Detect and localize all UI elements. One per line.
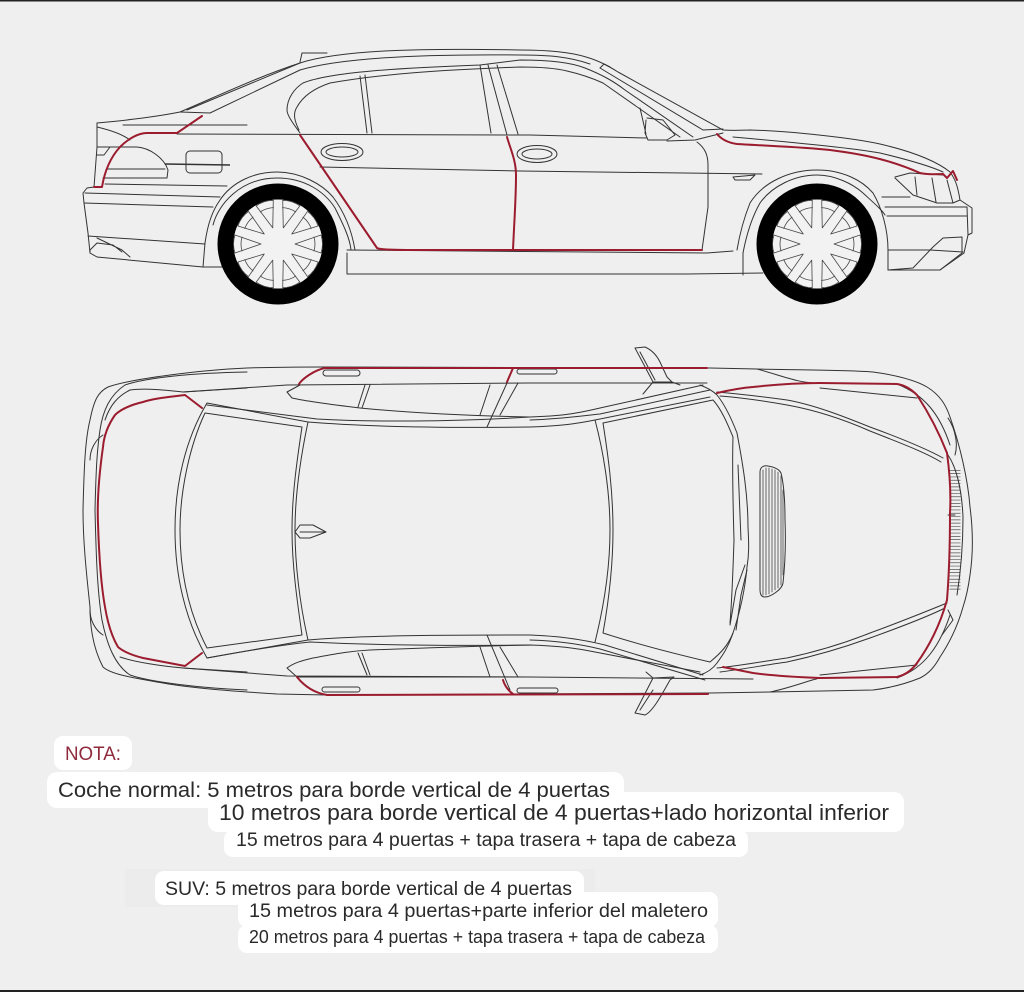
windshield <box>595 400 733 662</box>
antenna fin <box>295 525 326 538</box>
car outer outline, top <box>83 367 972 695</box>
front wheel <box>764 192 870 296</box>
rear bumper <box>84 184 227 257</box>
SUV row 3: 20 metros para 4 puertas + tapa trasera + tapa de cabeza <box>249 927 706 947</box>
faint shade behind SUV row <box>125 869 595 907</box>
top view of car <box>83 347 972 715</box>
left mirror <box>635 347 680 394</box>
normal car row 1: Coche normal: 5 metros para borde vertical de 4 puertas <box>58 779 610 802</box>
rear lamp and fuel door <box>97 147 230 178</box>
note heading: NOTA: <box>65 744 121 765</box>
normal car row 2: 10 metros para borde vertical de 4 puertas+lado horizontal inferior <box>219 800 889 825</box>
rear wheel arch <box>203 172 355 267</box>
rear window <box>175 403 308 658</box>
red trim: top <box>98 368 950 695</box>
hood lines <box>717 369 950 692</box>
door handles <box>322 369 558 693</box>
door seams and sills <box>320 142 763 274</box>
front wheel arch <box>737 170 888 275</box>
mirror <box>640 108 675 140</box>
roof edges <box>207 385 710 680</box>
rear wheel <box>226 192 330 296</box>
hood vent <box>760 466 785 597</box>
front grille hatch <box>942 418 963 635</box>
side windows <box>287 383 530 690</box>
notes block <box>47 736 904 953</box>
car body outline, side <box>83 49 972 270</box>
red trim: side <box>94 116 957 250</box>
side view of car <box>83 49 972 296</box>
front fender, headlight and bumper <box>733 137 968 270</box>
normal car row 3: 15 metros para 4 puertas + tapa trasera + tapa de cabeza <box>236 830 736 851</box>
SUV row 2: 15 metros para 4 puertas+parte inferior del maletero <box>249 901 708 922</box>
white label pills <box>47 736 904 953</box>
roof and pillars <box>287 55 723 137</box>
cowl and wipers <box>700 385 749 675</box>
right mirror <box>635 672 674 715</box>
door handles <box>321 144 557 162</box>
SUV row 1: SUV: 5 metros para borde vertical de 4 puertas <box>165 879 572 900</box>
